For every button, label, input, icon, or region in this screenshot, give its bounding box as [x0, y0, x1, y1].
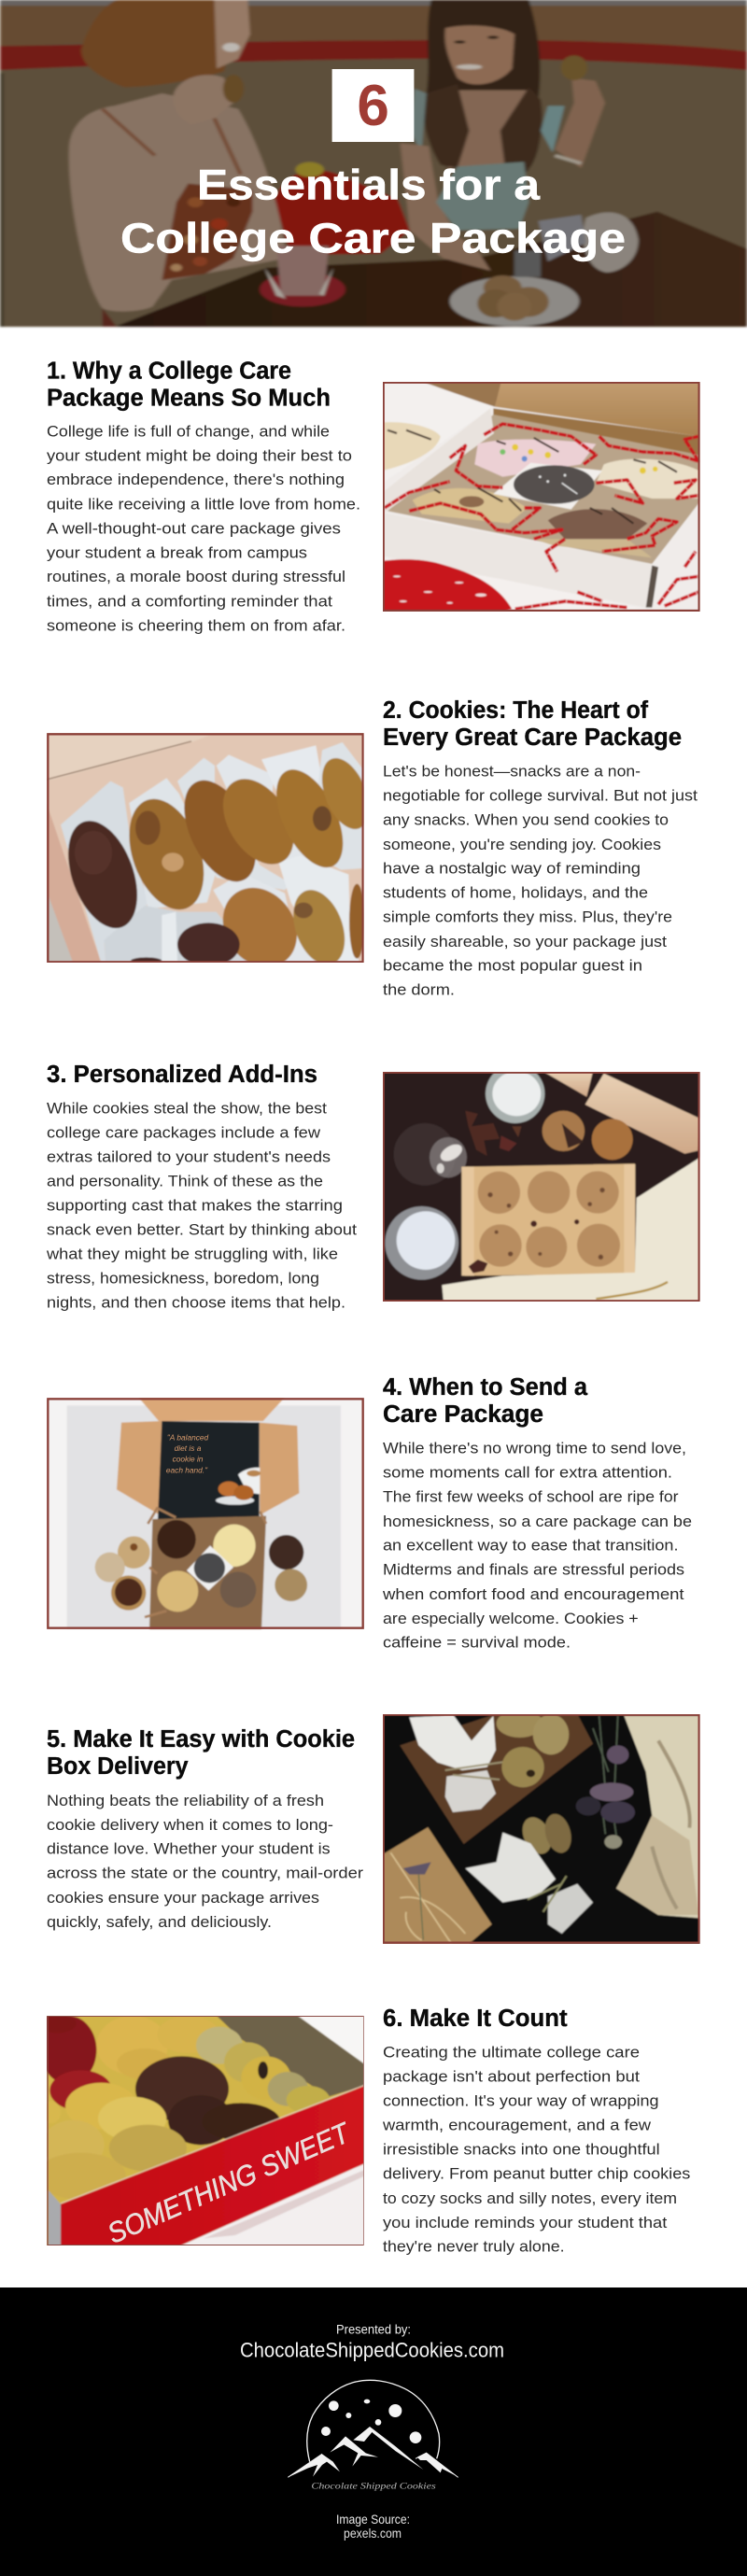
hero banner [0, 0, 747, 327]
body 3: stress, homesickness, boredom, long [47, 1271, 319, 1288]
heading 1 [47, 358, 331, 411]
heading 5 [47, 1726, 355, 1780]
body 5: quickly, safely, and deliciously. [47, 1914, 272, 1931]
presented by label: Presented by: [336, 2323, 411, 2337]
photo frame [48, 1399, 363, 1628]
heading 2 [383, 697, 682, 751]
title: College Care Package [120, 215, 626, 261]
title: Essentials for a [197, 161, 541, 209]
body 1: College life is full of change, and while [47, 423, 330, 440]
body 6: Creating the ultimate college care [383, 2044, 640, 2061]
body 2: any snacks. When you send cookies to [383, 812, 669, 829]
heading 5: Box Delivery [47, 1753, 189, 1780]
body 1 [47, 423, 360, 634]
body 1: your student a break from campus [47, 544, 307, 561]
body 5: cookie delivery when it comes to long- [47, 1817, 333, 1834]
photo frame [384, 1073, 699, 1301]
footer panel [0, 2287, 747, 2576]
box quote: cookie in [173, 1455, 204, 1464]
box quote: each hand." [166, 1465, 208, 1474]
section 4 text [382, 1374, 692, 1652]
logo wordmark: Chocolate Shipped Cookies [311, 2482, 436, 2491]
body 1: times, and a comforting reminder that [47, 594, 332, 611]
section 3 text [46, 1062, 357, 1311]
body 4: homesickness, so a care package can be [383, 1513, 692, 1530]
logo: cookie and mountains [288, 2380, 458, 2491]
body 2: became the most popular guest in [383, 958, 642, 975]
body 4 [382, 1441, 692, 1652]
body 1: your student might be doing their best to [47, 447, 352, 464]
body 1: someone is cheering them on from afar. [47, 617, 345, 634]
body 6: to cozy socks and silly notes, every item [383, 2190, 677, 2207]
heading 1: Package Means So Much [47, 385, 331, 411]
body 4: when comfort food and encouragement [382, 1586, 684, 1603]
body 1: embrace independence, there's nothing [47, 472, 345, 488]
photo frame [384, 1715, 699, 1943]
body 3 [46, 1100, 357, 1311]
body 4: Midterms and finals are stressful periods [383, 1562, 684, 1579]
body 3: college care packages include a few [47, 1124, 320, 1141]
body 3: supporting cast that makes the starring [47, 1197, 343, 1214]
body 4: some moments call for extra attention. [383, 1465, 672, 1482]
body 1: routines, a morale boost during stressful [47, 569, 345, 585]
body 4: are especially welcome. Cookies + [383, 1611, 639, 1627]
box quote: diet is a [175, 1443, 202, 1453]
box quote: "A balanced [167, 1433, 209, 1443]
section 5 text [47, 1726, 364, 1931]
body 5: Nothing beats the reliability of a fresh [47, 1793, 324, 1809]
title [120, 161, 626, 261]
body 4: While there's no wrong time to send love, [383, 1441, 686, 1457]
body 2: students of home, holidays, and the [383, 885, 648, 902]
body 2: Let's be honest—snacks are a non- [383, 764, 641, 781]
section 2 text [383, 697, 698, 999]
body 6: you include reminds your student that [383, 2215, 668, 2231]
section 1 text [47, 358, 360, 634]
body 4: an excellent way to ease that transition. [383, 1538, 678, 1555]
body 6: connection. It's your way of wrapping [383, 2093, 659, 2110]
heading 2: Every Great Care Package [383, 725, 682, 751]
number badge: 6 [357, 74, 389, 138]
heading 5: 5. Make It Easy with Cookie [47, 1726, 355, 1753]
heading 4: 4. When to Send a [383, 1374, 588, 1401]
heading 6: 6. Make It Count [383, 2006, 568, 2032]
body 5: distance love. Whether your student is [47, 1841, 331, 1858]
body 2: negotiable for college survival. But not just [383, 788, 698, 805]
photo 5: wrapped cookies on dark table with dried flowers [383, 1710, 700, 1944]
photo 2: cookies in paper liners in a pink box [47, 733, 364, 963]
body 5: across the state or the country, mail-order [47, 1865, 364, 1882]
hero photo: two women eating cookies in a booth [0, 0, 747, 327]
body 2: the dorm. [383, 982, 455, 999]
body 6: irresistible snacks into one thoughtful [383, 2142, 660, 2159]
heading 4: Care Package [383, 1401, 543, 1428]
heading 3: 3. Personalized Add-Ins [47, 1062, 317, 1088]
body 1: quite like receiving a little love from home. [47, 497, 360, 514]
body 2: someone, you're sending joy. Cookies [383, 837, 661, 853]
body 4: caffeine = survival mode. [383, 1635, 571, 1652]
photo 4: open kraft cookie box on white table [47, 1398, 364, 1629]
photo frame [48, 734, 363, 962]
body 6: warmth, encouragement, and a few [382, 2118, 651, 2134]
body 1: A well-thought-out care package gives [47, 520, 341, 537]
body 3: snack even better. Start by thinking about [47, 1221, 357, 1238]
body 3: While cookies steal the show, the best [47, 1100, 327, 1117]
image source credit: pexels.com [344, 2527, 402, 2541]
heading 2: 2. Cookies: The Heart of [383, 697, 648, 724]
body 5 [47, 1793, 364, 1931]
photo 3: cookies on wooden board with milk and rolling pin [383, 1064, 700, 1302]
body 6 [382, 2044, 690, 2256]
photo frame [48, 2016, 364, 2245]
body 3: and personality. Think of these as the [47, 1173, 323, 1189]
body 2 [383, 764, 698, 999]
body 6: package isn't about perfection but [383, 2069, 640, 2086]
heading 1: 1. Why a College Care [47, 358, 291, 384]
body 6: they're never truly alone. [383, 2239, 565, 2256]
photo 1: open white care package with red shred [383, 382, 700, 612]
body 3: what they might be struggling with, like [46, 1246, 338, 1263]
body 2: have a nostalgic way of reminding [383, 861, 641, 878]
body 5: cookies ensure your package arrives [47, 1890, 319, 1907]
box label: SOMETHING SWEET [103, 2117, 356, 2250]
body 3: extras tailored to your student's needs [47, 1149, 331, 1166]
heading 4 [383, 1374, 588, 1428]
photo frame [384, 383, 699, 611]
image source credit [336, 2513, 410, 2541]
photo 6: red box labelled Something Sweet full of cookies [35, 2014, 364, 2250]
website: ChocolateShippedCookies.com [240, 2338, 504, 2362]
body 4: The first few weeks of school are ripe for [383, 1488, 679, 1505]
body 3: nights, and then choose items that help. [47, 1294, 345, 1311]
body 2: simple comforts they miss. Plus, they're [383, 909, 672, 926]
body 2: easily shareable, so your package just [383, 934, 667, 950]
image source credit: Image Source: [336, 2513, 410, 2527]
body 6: delivery. From peanut butter chip cookies [383, 2166, 690, 2183]
section 6 text [382, 2006, 690, 2256]
number badge [332, 69, 414, 142]
box quote [166, 1433, 209, 1474]
